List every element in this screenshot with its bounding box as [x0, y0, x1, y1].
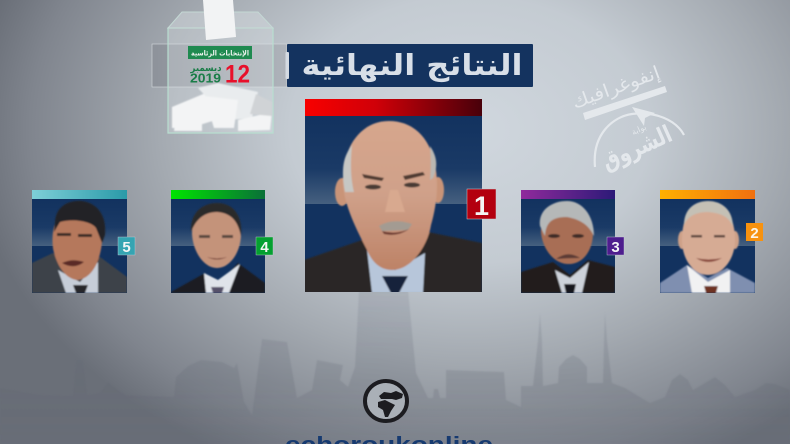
date year: 2019 — [190, 70, 221, 86]
logo: infographic echorouk — [569, 62, 684, 176]
title text: النتائج النهائية — [302, 48, 522, 82]
panel: rank 4 candidate — [171, 190, 273, 293]
ballot paper in slot — [203, 0, 236, 40]
icon: ballot box: الإنتخابات الرئاسية — [191, 48, 249, 58]
panel: rank 5 candidate — [32, 190, 135, 293]
icon: ballot box — [168, 0, 273, 133]
panel: rank 1 candidate — [304, 99, 496, 293]
piled ballots — [172, 83, 272, 131]
portrait: rank 1 — [304, 121, 482, 293]
arc — [595, 113, 684, 167]
skyline silhouette — [0, 290, 790, 444]
bar — [583, 86, 667, 120]
badge: rank 2: 2 — [750, 225, 759, 242]
badge: rank 3: 3 — [611, 239, 620, 256]
title banner — [286, 44, 533, 87]
portrait: rank 2 — [660, 201, 755, 293]
date day: 12 — [225, 60, 250, 88]
panel: rank 3 candidate — [521, 190, 624, 293]
brand name: الشروق — [597, 120, 676, 176]
date month: ديسمبر — [190, 63, 222, 74]
portrait: rank 3 — [521, 201, 615, 293]
badge: rank 5: 5 — [122, 239, 131, 256]
grey title band — [152, 44, 287, 87]
portrait: rank 5 — [32, 201, 127, 293]
badge: rank 4: 4 — [260, 239, 269, 256]
brand prefix: بوابة — [630, 123, 648, 137]
election label — [188, 46, 252, 59]
logo: infographic echorouk: إنفوغرافيك — [569, 62, 663, 113]
badge: rank 1: 1 — [474, 191, 489, 221]
badge: rank 1 — [467, 189, 496, 221]
pointer arrow — [632, 107, 655, 126]
panel: rank 2 candidate — [660, 190, 763, 293]
icon: globe logo — [365, 381, 407, 421]
portrait: rank 4 — [171, 203, 265, 293]
